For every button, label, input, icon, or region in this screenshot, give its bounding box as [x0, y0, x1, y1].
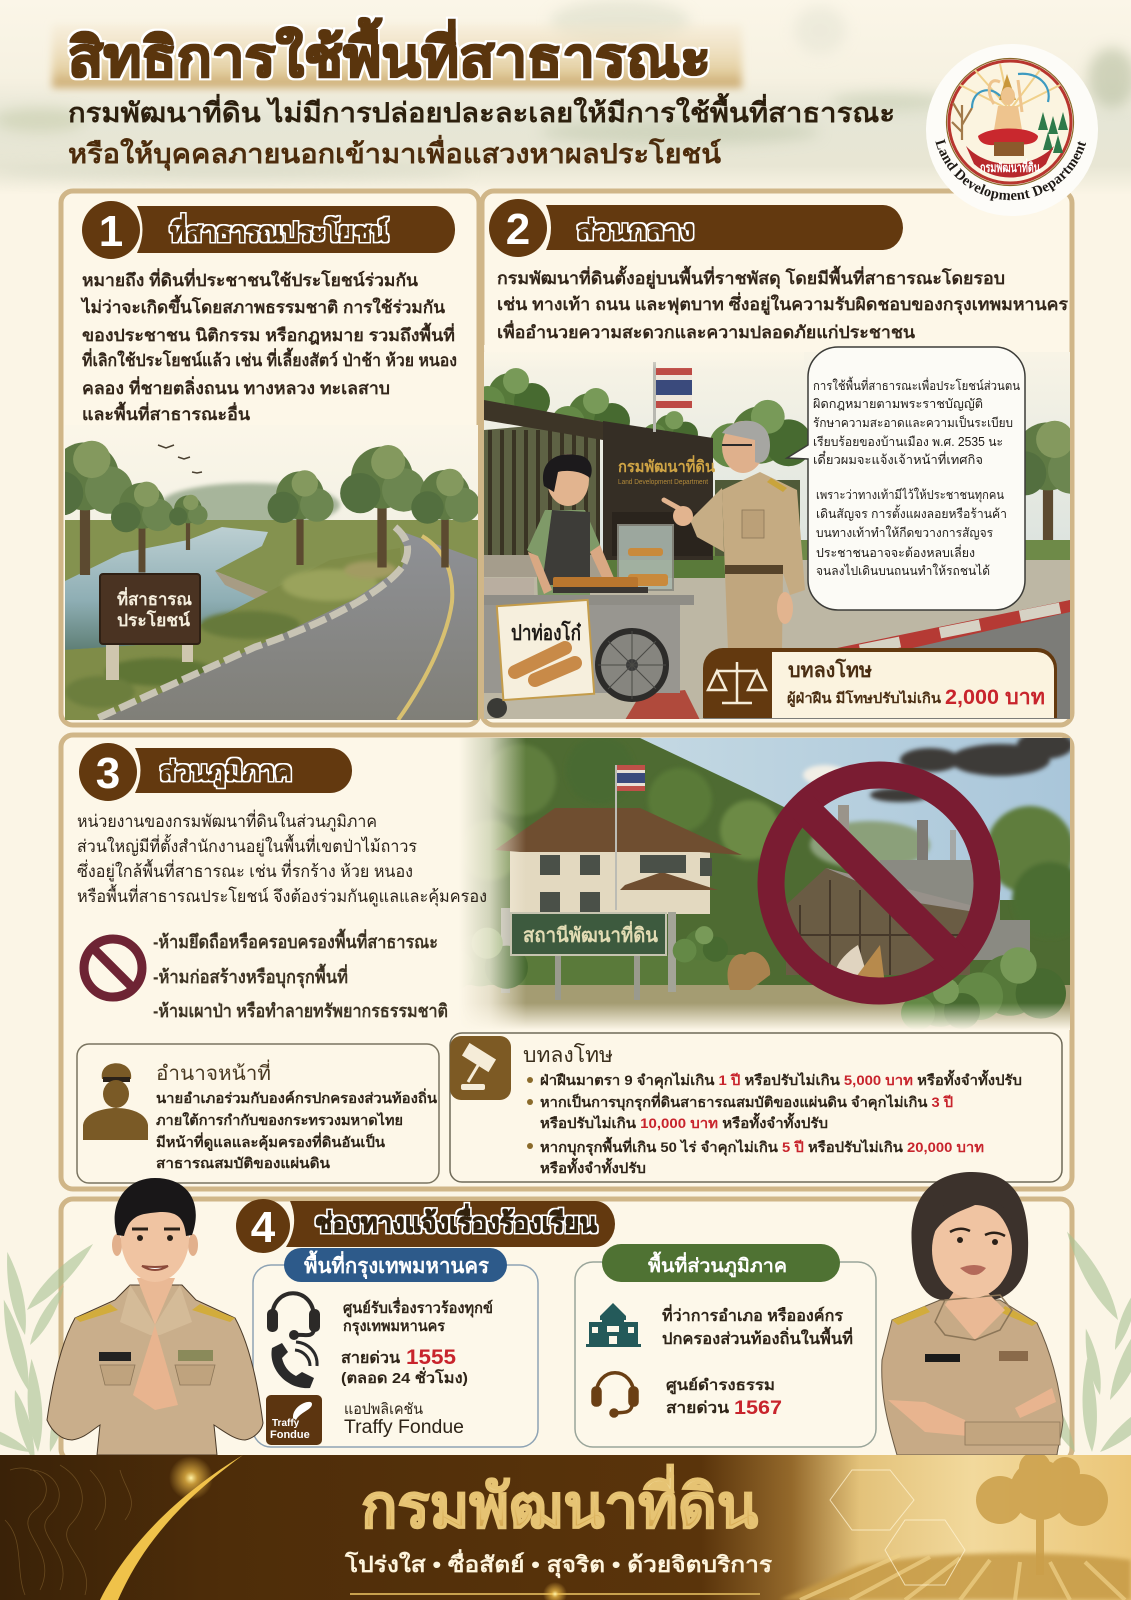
panel 3 heading: ส่วนภูมิภาค [160, 756, 292, 788]
icon: gavel [450, 1036, 511, 1100]
panel 2 illustration: street vendor scene: Land Development Department [618, 477, 709, 486]
fade at top of panel 2 illustration [484, 345, 804, 370]
panel 2 penalty box: ผู้ฝ่าฝืน มีโทษปรับไม่เกิน [787, 689, 941, 707]
sign: public land: ประโยชน์ [117, 610, 190, 630]
penalty box panel 3: หรือปรับไม่เกิน 10,000 บาท หรือทั้งจำทั้งปรับ [540, 1112, 828, 1131]
panel 3 text: ซึ่งอยู่ใกล้พื้นที่สาธารณะ เช่น ที่รกร้าง ห้วย หนอง [77, 859, 413, 882]
penalty box panel 3: หากเป็นการบุกรุกที่ดินสาธารณสมบัติของแผ่นดิน จำคุกไม่เกิน 3 ปี [540, 1092, 953, 1111]
prohibition list [153, 928, 448, 1021]
penalty box panel 3: หากบุกรุกพื้นที่เกิน 50 ไร่ จำคุกไม่เกิน 5 ปี หรือปรับไม่เกิน 20,000 บาท [540, 1136, 984, 1156]
logo: Land Development Department seal [926, 44, 1098, 216]
icon: prohibition [84, 939, 142, 997]
duty box: นายอำเภอร่วมกับองค์กรปกครองส่วนท้องถิ่น [156, 1088, 437, 1106]
panel 3 number [79, 743, 137, 801]
panel 3 text: หรือพื้นที่สาธารณประโยชน์ จึงต้องร่วมกันดูแลและคุ้มครอง [77, 884, 487, 907]
panel 2 number [489, 199, 547, 257]
title band [52, 24, 742, 88]
panel 2 text [497, 265, 1069, 342]
subtitle: หรือให้บุคคลภายนอกเข้ามาเพื่อแสวงหาผลประโยชน์ [68, 134, 722, 171]
duty box: ภายใต้การกำกับของกระทรวงมหาดไทย [156, 1111, 403, 1128]
panel 1 text: คลอง ที่ชายตลิ่งถนน ทางหลวง ทะเลสาบ [82, 376, 390, 398]
icon: Traffy Fondue [266, 1395, 322, 1445]
prohibition list: -ห้ามก่อสร้างหรือบุกรุกพื้นที่ [153, 963, 348, 989]
subtitle [68, 92, 895, 171]
Bangkok channel panel: กรุงเทพมหานคร [343, 1318, 446, 1336]
panel 1 text: หมายถึง ที่ดินที่ประชาชนใช้ประโยชน์ร่วมกัน [82, 268, 418, 290]
speech bubble: จนลงไปเดินบนถนนทำให้รถชนได้ [816, 564, 990, 578]
panel 1 number [82, 201, 140, 259]
panel 1 frame [61, 191, 479, 725]
duty box: สาธารณสมบัติของแผ่นดิน [156, 1155, 330, 1171]
female officer arms crossed [882, 1172, 1063, 1455]
icon: Traffy Fondue: Fondue [270, 1429, 310, 1441]
title: สิทธิการใช้พื้นที่สาธารณะ [68, 18, 711, 88]
panel 2 penalty box: 2,000 บาท [945, 686, 1045, 709]
footer title: กรมพัฒนาที่ดิน [361, 1464, 758, 1540]
prohibition list: -ห้ามเผาป่า หรือทำลายทรัพยากรธรรมชาติ [153, 1001, 448, 1021]
speech bubble: รักษาความสะอาดและความเป็นระเบียบ [813, 415, 1013, 430]
regional channel panel: ปกครองส่วนท้องถิ่นในพื้นที่ [662, 1326, 853, 1348]
speech bubble [787, 347, 1025, 610]
plant right [1025, 1228, 1131, 1457]
duty box: อำนาจหน้าที่ [156, 1059, 271, 1085]
Bangkok channel panel [253, 1248, 538, 1447]
panel 1 illustration: roadside river [39, 425, 480, 720]
panel 1 number: 1 [99, 207, 123, 256]
panel 2 text: เพื่ออำนวยความสะดวกและความปลอดภัยแก่ประชาชน [497, 320, 915, 342]
panel 3 number: 3 [96, 749, 120, 798]
panel 1 text: และพื้นที่สาธารณะอื่น [82, 401, 250, 424]
panel 1 heading: ที่สาธารณประโยชน์ [170, 213, 388, 247]
Bangkok channel panel: Traffy Fondue [344, 1417, 464, 1438]
sign: land development station: สถานีพัฒนาที่ดิน [523, 920, 658, 947]
panel 1 text: ของประชาชน นิติกรรม หรือกฎหมาย รวมถึงพื้นที่ [82, 322, 455, 345]
panel 2 heading: ส่วนกลาง [577, 215, 694, 245]
icon: scales [708, 662, 766, 703]
speech bubble: เดี๋ยวผมจะแจ้งเจ้าหน้าที่เทศกิจ [813, 450, 983, 467]
footer band [0, 1452, 1131, 1600]
sign: patongko [497, 600, 594, 700]
Bangkok channel panel: พื้นที่กรุงเทพมหานคร [304, 1250, 490, 1280]
prohibition sign large [771, 775, 987, 991]
panel 4 frame [61, 1199, 1072, 1461]
speech bubble: เดินสัญจร การตั้งแผงลอยหรือร้านค้า [816, 504, 1007, 521]
icon: headset [269, 1293, 318, 1338]
panel 4 heading: ช่องทางแจ้งเรื่องร้องเรียน [315, 1203, 598, 1238]
speech bubble: บนทางเท้าทำให้กีดขวางการสัญจร [816, 526, 993, 540]
prohibition list: -ห้ามยึดถือหรือครอบครองพื้นที่สาธารณะ [153, 928, 438, 952]
speech bubble: ประชาชนอาจจะต้องหลบเลี่ยง [816, 544, 975, 560]
panel 3 frame [61, 735, 1072, 1189]
sign: public land [100, 574, 200, 644]
duty box: มีหน้าที่ดูแลและคุ้มครองที่ดินอันเป็น [156, 1132, 385, 1151]
panel 1 text [80, 268, 457, 424]
logo: Land Development Department seal: กรมพัฒนาที่ดิน [980, 158, 1040, 175]
panel 3 heading [135, 748, 352, 793]
logo: Land Development Department seal: Land Development Department [935, 138, 1086, 202]
panel 1 text: ไม่ว่าจะเกิดขึ้นโดยสภาพธรรมชาติ การใช้ร่วมกัน [80, 294, 445, 317]
header watercolor lake background [0, 0, 1131, 195]
sign: public land: ที่สาธารณ [117, 587, 192, 609]
speech bubble: ผิดกฎหมายตามพระราชบัญญัติ [813, 397, 983, 411]
penalty box panel 3: หรือทั้งจำทั้งปรับ [540, 1157, 646, 1176]
regional channel panel: ศูนย์ดำรงธรรม [666, 1376, 775, 1395]
penalty box panel 3: ฝ่าฝืนมาตรา 9 จำคุกไม่เกิน 1 ปี หรือปรับไม่เกิน 5,000 บาท หรือทั้งจำทั้งปรับ [540, 1069, 1022, 1089]
penalty box panel 3: บทลงโทษ [523, 1043, 613, 1067]
icon: government building [586, 1303, 641, 1347]
regional channel panel [575, 1244, 876, 1447]
panel 2 heading [546, 205, 903, 250]
panel 1 text: ที่เลิกใช้ประโยชน์แล้ว เช่น ที่เลี้ยงสัตว์ ป่าช้า ห้วย หนอง [82, 347, 457, 370]
icon: phone [271, 1342, 317, 1388]
panel 2 penalty box: บทลงโทษ [788, 658, 872, 682]
panel 2 illustration: street vendor scene: กรมพัฒนาที่ดิน [618, 455, 715, 476]
Bangkok channel panel: สายด่วน [341, 1350, 400, 1367]
subtitle: กรมพัฒนาที่ดิน ไม่มีการปล่อยปละละเลยให้มีการใช้พื้นที่สาธารณะ [68, 92, 895, 128]
male officer with wai gesture [47, 1178, 263, 1455]
regional channel panel: 1567 [734, 1398, 782, 1419]
Bangkok channel panel: 1555 [406, 1346, 456, 1369]
sign: patongko: ปาท่องโก๋ [511, 620, 581, 645]
panel 1 heading [137, 206, 455, 253]
footer slogan: โปร่งใส • ซื่อสัตย์ • สุจริต • ด้วยจิตบริการ [344, 1548, 772, 1579]
penalty box panel 3 [450, 1033, 1062, 1182]
icon: headset regional [593, 1373, 637, 1416]
panel 2 text: กรมพัฒนาที่ดินตั้งอยู่บนพื้นที่ราชพัสดุ โดยมีพื้นที่สาธารณะโดยรอบ [497, 265, 1005, 290]
sign: land development station [511, 913, 666, 955]
icon: officer [83, 1063, 148, 1140]
speech bubble: เพราะว่าทางเท้ามีไว้ให้ประชาชนทุกคน [816, 488, 1004, 503]
duty box [77, 1044, 439, 1183]
panel 2 frame [482, 191, 1072, 725]
plant left [0, 1239, 98, 1465]
panel 2 illustration: street vendor scene [471, 352, 1096, 720]
panel 3 illustration: station and violating factory [433, 731, 1088, 1030]
regional channel panel: พื้นที่ส่วนภูมิภาค [648, 1251, 787, 1278]
speech bubble: เรียบร้อยของบ้านเมือง พ.ศ. 2535 นะ [813, 435, 1003, 449]
Bangkok channel panel: แอปพลิเคชัน [344, 1401, 423, 1418]
Bangkok channel panel: (ตลอด 24 ชั่วโมง) [341, 1367, 468, 1387]
speech bubble: การใช้พื้นที่สาธารณะเพื่อประโยชน์ส่วนตน [813, 376, 1020, 393]
regional channel panel: ที่ว่าการอำเภอ หรือองค์กร [662, 1304, 843, 1325]
panel 2 penalty box [703, 648, 1057, 718]
panel 4 heading [286, 1201, 615, 1247]
panel 2 number: 2 [506, 205, 530, 254]
regional channel panel: สายด่วน [666, 1400, 729, 1417]
icon: Traffy Fondue: Traffy [272, 1418, 300, 1429]
Bangkok channel panel: ศูนย์รับเรื่องราวร้องทุกข์ [343, 1297, 493, 1318]
panel 2 text: เช่น ทางเท้า ถนน และฟุตบาท ซึ่งอยู่ในความรับผิดชอบของกรุงเทพมหานคร [497, 292, 1069, 316]
panel 3 text: หน่วยงานของกรมพัฒนาที่ดินในส่วนภูมิภาค [77, 809, 377, 832]
panel 4 number [236, 1199, 290, 1253]
panel 4 number: 4 [251, 1203, 276, 1252]
panel 3 text [77, 809, 487, 907]
panel 3 text: ส่วนใหญ่มีที่ตั้งสำนักงานอยู่ในพื้นที่เขตป่าไม้ถาวร [77, 834, 417, 857]
